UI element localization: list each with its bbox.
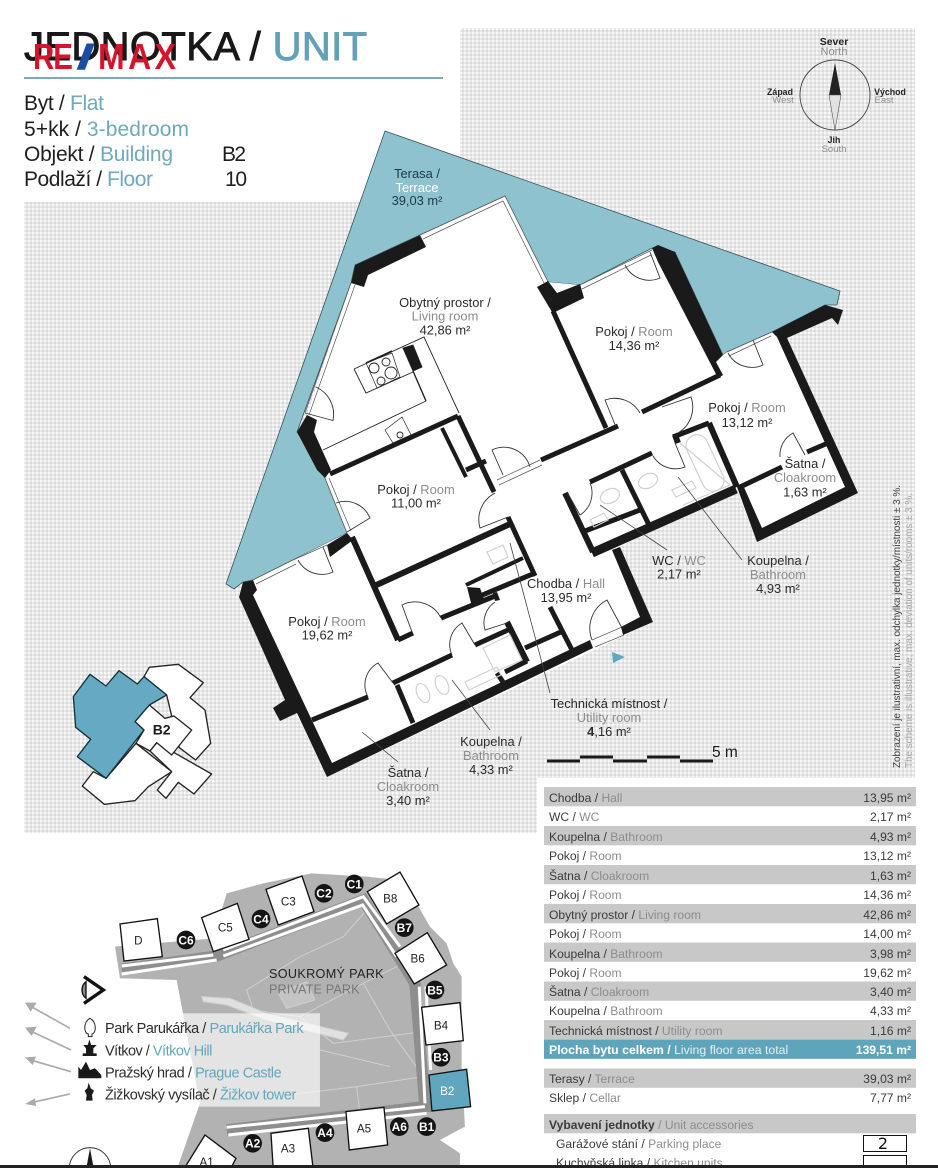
label: cloakroom 3,40: Cloakroom xyxy=(377,779,439,794)
label: bathroom 4,33: Bathroom xyxy=(463,748,519,763)
building labels: B8 xyxy=(383,892,397,905)
stairwell markers: B3 xyxy=(433,1051,449,1065)
label: room 14,36: 14,36 m² xyxy=(609,338,660,353)
legend text: Pražský hrad / Prague Castle xyxy=(105,1066,282,1082)
row: cloakroom 1,63 xyxy=(544,865,916,884)
unit info: B2 xyxy=(222,143,246,166)
row: terrace: 39,03 m² xyxy=(863,1072,911,1086)
disclaimer xyxy=(892,485,915,768)
building labels: A3 xyxy=(281,1143,295,1156)
compass: Sever xyxy=(820,36,848,48)
row: room 14,00: Pokoj / Room xyxy=(549,927,622,941)
compass: Jih xyxy=(828,135,840,145)
row: room 14,36: 14,36 m² xyxy=(863,888,911,902)
label: cloakroom 1,63: Šatna / xyxy=(785,456,825,471)
compass: Západ xyxy=(767,87,793,97)
label: living room: 42,86 m² xyxy=(420,322,471,338)
row: room 19,62: Pokoj / Room xyxy=(549,966,622,980)
row: room 13,12: 13,12 m² xyxy=(863,849,911,863)
row: cellar xyxy=(549,1091,911,1105)
label: room 19,62: 19,62 m² xyxy=(302,628,353,642)
disclaimer: Zobrazení je ilustrativní, max. odchylka jednotky/místnosti ± 3 %. xyxy=(892,485,903,768)
row: living room: 42,86 m² xyxy=(863,908,911,922)
unit info: 10 xyxy=(225,168,247,191)
label: cloakroom 3,40: 3,40 m² xyxy=(386,793,431,808)
label: hall: 13,95 m² xyxy=(541,590,592,605)
legend icons xyxy=(78,1018,101,1101)
row: cloakroom 3,40: Šatna / Cloakroom xyxy=(549,984,649,999)
entrance marker xyxy=(612,652,625,663)
label: room 14,36: Pokoj / Room xyxy=(595,324,673,339)
terrace xyxy=(226,131,840,589)
key plan: building B2: B2 xyxy=(153,722,171,738)
label: bathroom 4,93: Bathroom xyxy=(750,567,806,582)
row: bathroom 4,93 xyxy=(544,826,916,845)
logo: RE/MAX: / xyxy=(76,37,95,77)
row: WC: 2,17 m² xyxy=(870,810,911,824)
building labels xyxy=(134,892,454,1168)
label: cloakroom 1,63: 1,63 m² xyxy=(783,484,828,500)
windows xyxy=(253,196,772,647)
unit info: Byt / Flat xyxy=(24,92,104,115)
logo: RE/MAX: RE xyxy=(33,36,73,77)
area table xyxy=(544,787,916,1168)
label: cloakroom 3,40: Šatna / xyxy=(388,765,428,780)
row: room 14,00: 14,00 m² xyxy=(863,927,911,941)
row: terrace: Terasy / Terrace xyxy=(549,1072,635,1086)
row: kitchen units xyxy=(556,1156,906,1168)
label: cloakroom 1,63: Cloakroom xyxy=(774,470,836,485)
row: utility room: Technická místnost / Utility room xyxy=(549,1024,722,1038)
stairwell markers: C1 xyxy=(347,877,362,891)
label: bathroom 4,33: Koupelna / xyxy=(460,734,522,749)
label: room 11,00: Pokoj / Room xyxy=(377,482,455,497)
site compass xyxy=(69,1148,111,1168)
label: room 19,62: Pokoj / Room xyxy=(288,614,366,629)
row: utility room: 1,16 m² xyxy=(870,1024,911,1038)
compass: Východ xyxy=(874,87,906,97)
row: room 19,62 xyxy=(549,966,911,980)
label: WC: WC / WC xyxy=(652,553,706,568)
compass: West xyxy=(772,95,794,106)
stairwell markers: C4 xyxy=(253,912,269,926)
title rule xyxy=(24,77,443,79)
solid walls xyxy=(239,235,858,777)
row: utility room xyxy=(544,1020,916,1039)
row: hall: 13,95 m² xyxy=(863,791,911,805)
logo: RE/MAX: MAX xyxy=(98,37,176,77)
label: bathroom 4,93: 4,93 m² xyxy=(756,581,801,596)
row: total xyxy=(544,1040,916,1059)
unit info: Podlaží / Floor xyxy=(24,168,153,191)
label: terrace: Terrace xyxy=(396,180,438,195)
row: cloakroom 1,63: 1,63 m² xyxy=(870,869,911,883)
view arrows xyxy=(25,1003,71,1106)
compass: North xyxy=(821,46,847,58)
leader lines xyxy=(362,477,742,762)
label: room 11,00: 11,00 m² xyxy=(391,496,442,510)
row: terrace xyxy=(544,1068,916,1088)
compass: South xyxy=(822,144,846,155)
label: bathroom 4,33: 4,33 m² xyxy=(469,762,514,777)
stairwell markers: C2 xyxy=(316,887,332,901)
row: room 13,12: Pokoj / Room xyxy=(549,849,622,863)
label: living room: Obytný prostor / xyxy=(399,295,491,310)
building labels: A5 xyxy=(357,1122,371,1135)
label: room 13,12: Pokoj / Room xyxy=(708,400,786,415)
row: bathroom 3,98: Koupelna / Bathroom xyxy=(549,947,663,961)
unit info: 5+kk / 3-bedroom xyxy=(24,118,189,141)
label: terrace: 39,03 m² xyxy=(392,193,443,208)
compass: East xyxy=(874,95,894,106)
row: living room: Obytný prostor / Living room xyxy=(549,908,701,922)
key plan: building B2 xyxy=(73,664,212,804)
stairwell markers: B1 xyxy=(419,1120,435,1134)
row: hall: Chodba / Hall xyxy=(549,791,622,805)
stairwell markers: A2 xyxy=(245,1137,261,1151)
row: living room xyxy=(544,904,916,923)
stairwell markers: C6 xyxy=(178,933,194,947)
building labels: B2 xyxy=(440,1085,454,1098)
stairwell markers: B7 xyxy=(397,921,412,935)
viewpoint icon xyxy=(82,977,103,1003)
legend text: Vítkov / Vítkov Hill xyxy=(105,1043,212,1059)
stairwell markers: A4 xyxy=(317,1126,333,1140)
floor plan xyxy=(239,196,858,777)
building labels: B4 xyxy=(434,1020,449,1033)
site map: PRIVATE PARK xyxy=(269,983,360,997)
label: utility room: Utility room xyxy=(577,710,641,725)
row: parking place: Garážové stání / Parking place xyxy=(556,1137,722,1151)
compass xyxy=(767,36,906,155)
row: accessories heading: Vybavení jednotky / Unit accessories xyxy=(549,1118,754,1132)
legend text: Žižkovský vysílač / Žižkov tower xyxy=(105,1086,296,1103)
building labels: C5 xyxy=(218,922,233,935)
label: WC: 2,17 m² xyxy=(657,566,702,582)
hatched background xyxy=(24,28,915,833)
scale bar xyxy=(547,744,738,761)
title: JEDNOTKA / UNIT xyxy=(24,25,367,69)
row: total: 139,51 m² xyxy=(856,1043,911,1057)
doors xyxy=(298,252,805,697)
row: bathroom 4,33: 4,33 m² xyxy=(870,1004,911,1018)
legend overlay xyxy=(180,1013,320,1107)
row: hall xyxy=(544,787,916,806)
row: bathroom 3,98 xyxy=(544,942,916,962)
stairwell markers: A6 xyxy=(392,1120,407,1134)
building labels: D xyxy=(134,934,143,947)
unit info xyxy=(24,92,247,191)
row: bathroom 4,93: 4,93 m² xyxy=(870,830,911,844)
disclaimer: The scheme is illustrative, max. deviation of units/rooms ± 3 %. xyxy=(904,493,915,768)
buildings xyxy=(120,872,471,1168)
row: room 14,36 xyxy=(549,888,911,902)
label: living room: Living room xyxy=(412,308,478,324)
site map xyxy=(25,872,471,1168)
private park xyxy=(115,873,465,1168)
stairwell markers: B5 xyxy=(427,983,443,997)
row: WC xyxy=(549,810,911,824)
kitchen xyxy=(323,337,459,450)
logo: RE/MAX xyxy=(33,36,176,77)
label: terrace: Terasa / xyxy=(394,166,440,181)
legend text xyxy=(105,1021,304,1103)
row: cloakroom 3,40 xyxy=(544,982,916,1001)
row: cellar: Sklep / Cellar xyxy=(549,1091,621,1105)
park label: SOUKROMÝ PARK xyxy=(269,966,384,981)
label: hall: Chodba / Hall xyxy=(527,576,605,591)
row: bathroom 4,93: Koupelna / Bathroom xyxy=(549,830,663,844)
roads xyxy=(122,897,431,1135)
row: bathroom 4,33: Koupelna / Bathroom xyxy=(549,1004,663,1018)
row: room 14,36: Pokoj / Room xyxy=(549,888,622,902)
row: total: Plocha bytu celkem / Living floor area total xyxy=(549,1043,788,1057)
label: utility room: 4,16 m² xyxy=(587,724,631,739)
row: cellar: 7,77 m² xyxy=(870,1091,911,1105)
building labels: C3 xyxy=(281,895,296,908)
row: room 19,62: 19,62 m² xyxy=(863,966,911,980)
row: cloakroom 1,63: Šatna / Cloakroom xyxy=(549,868,649,883)
stairwell markers xyxy=(177,875,450,1153)
scale bar: 5 m xyxy=(712,744,738,761)
row: accessories heading xyxy=(544,1114,916,1133)
park paths xyxy=(202,910,423,1113)
floor area xyxy=(239,196,858,777)
label: room 13,12: 13,12 m² xyxy=(722,415,773,430)
row: WC: WC / WC xyxy=(549,810,600,824)
row: bathroom 4,33 xyxy=(549,1004,911,1018)
bathroom fixtures xyxy=(413,431,730,705)
row: cloakroom 3,40: 3,40 m² xyxy=(870,985,911,999)
building labels: B6 xyxy=(410,952,425,965)
row: parking place: 2 xyxy=(878,1134,888,1153)
bottom edge bar xyxy=(0,1165,938,1168)
partition walls xyxy=(312,311,828,723)
room labels xyxy=(288,166,836,808)
label: utility room: Technická místnost / xyxy=(551,696,667,711)
row: room 13,12 xyxy=(549,849,911,863)
unit info: Objekt / Building xyxy=(24,143,173,166)
row: parking place xyxy=(556,1134,906,1153)
row: room 14,00 xyxy=(549,927,911,941)
legend text: Park Parukářka / Parukářka Park xyxy=(105,1021,304,1037)
row: bathroom 3,98: 3,98 m² xyxy=(870,947,911,961)
label: bathroom 4,93: Koupelna / xyxy=(747,553,809,568)
